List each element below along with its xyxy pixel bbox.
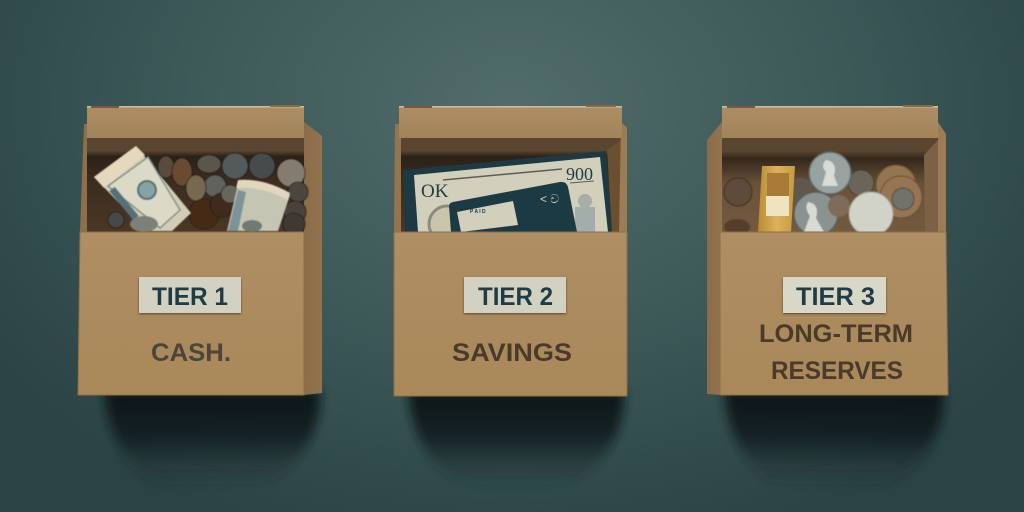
box interior	[83, 135, 305, 233]
tier label: TIER 3	[796, 283, 875, 311]
category text: CASH.	[151, 339, 231, 367]
inner right wall	[924, 140, 938, 232]
illustration: bank card	[449, 182, 577, 232]
category text: LONG-TERM	[759, 320, 913, 348]
panel: tier 2 savings box	[394, 105, 627, 489]
category text: RESERVES	[771, 357, 903, 385]
tier label	[464, 277, 566, 313]
tier label	[783, 277, 886, 313]
front panel	[394, 232, 627, 396]
illustration: rolled banknotes right	[227, 180, 290, 232]
illustration: rolled banknotes left	[94, 146, 191, 232]
illustration: dark backing card	[403, 151, 612, 232]
lid flap	[722, 105, 938, 138]
left side wall	[707, 122, 722, 395]
right side wall	[938, 122, 946, 233]
lid flap	[87, 105, 304, 138]
tier label: TIER 2	[478, 283, 553, 311]
tier label: TIER 1	[152, 283, 228, 311]
tier label	[139, 277, 241, 313]
lid flap	[399, 105, 622, 138]
illustration: coins	[724, 152, 922, 236]
inner right wall	[607, 140, 621, 232]
panel: tier 1 cash box	[78, 105, 322, 489]
left flap	[80, 124, 87, 232]
illustration: bank card: < ව	[540, 192, 559, 206]
box shadow	[104, 390, 320, 489]
box shadow	[724, 390, 944, 489]
panel: tier 3 long-term reserves box	[707, 105, 948, 489]
right side wall	[619, 122, 627, 233]
illustration: coins	[108, 153, 308, 235]
box interior	[720, 135, 942, 233]
illustration: banknote: OK	[421, 181, 449, 202]
illustration: bank card: P A I D	[470, 209, 486, 215]
category text	[759, 320, 913, 385]
front panel	[720, 232, 948, 395]
box shadow	[408, 390, 624, 489]
illustration: banknote: 900	[566, 164, 593, 184]
illustration: gold bar	[758, 166, 795, 232]
box interior	[397, 135, 625, 233]
category text: SAVINGS	[452, 339, 572, 367]
front panel	[78, 232, 304, 395]
illustration: banknote	[414, 157, 608, 242]
right side wall	[304, 122, 322, 395]
left side wall	[394, 124, 401, 232]
